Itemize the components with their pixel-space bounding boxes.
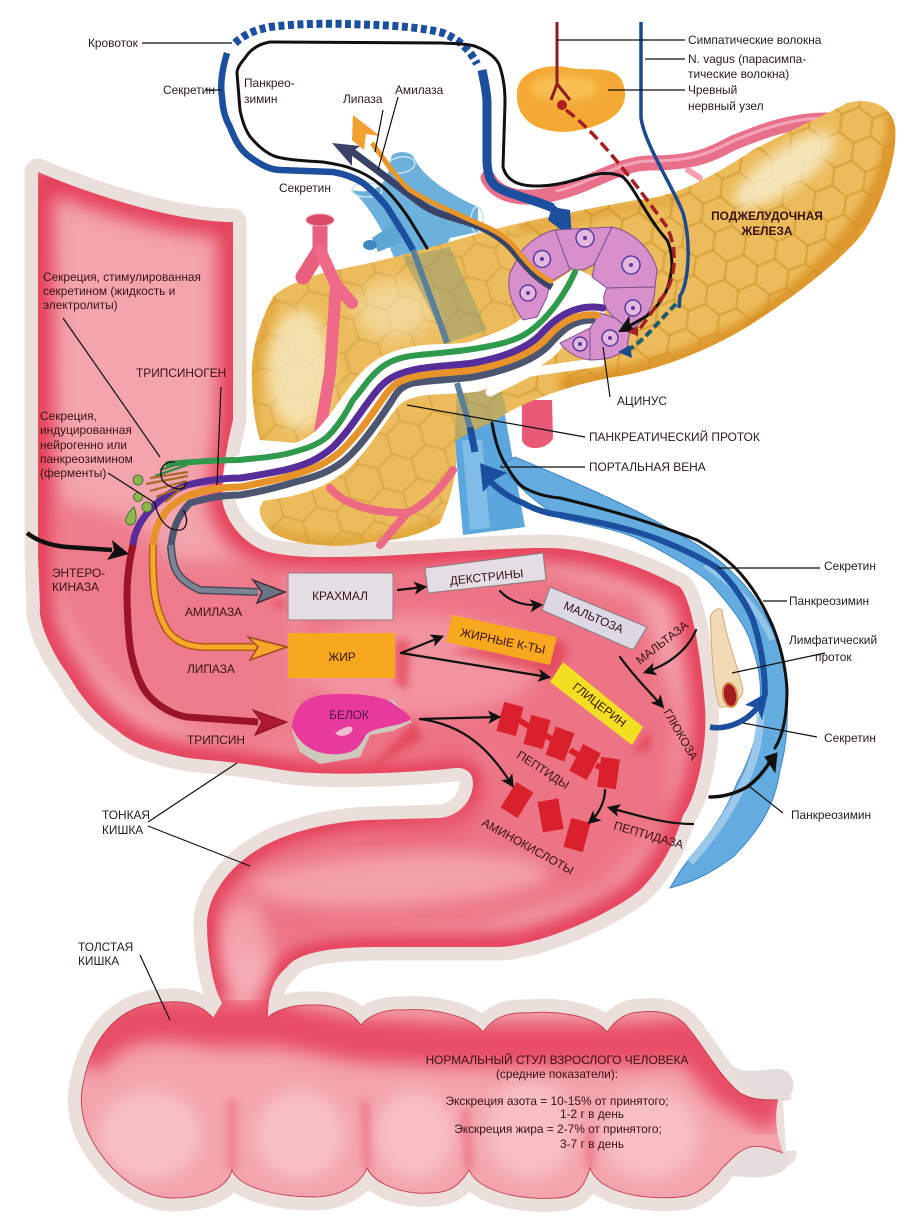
enzyme labels in lumen: ГЛЮКОЗА bbox=[660, 706, 701, 763]
top right labels: N. vagus (парасимпа- bbox=[688, 52, 806, 66]
top right labels: нервный узел bbox=[688, 99, 764, 113]
substrate box: glycerin bbox=[550, 662, 643, 745]
substrate box: maltose bbox=[542, 587, 647, 650]
leader lines bbox=[63, 40, 825, 1020]
ducts: enzyme bundle to duodenum bbox=[133, 272, 603, 550]
duodenum secretion notes: электролиты) bbox=[43, 298, 118, 312]
enzyme labels in lumen: АМИНОКИСЛОТЫ bbox=[480, 815, 576, 877]
top left labels: Секретин bbox=[163, 83, 215, 97]
orange and navy ducts from acinus to exits bbox=[332, 115, 552, 287]
duodenum secretion notes: Секреция, bbox=[40, 409, 97, 423]
middle right labels: ПАНКРЕАТИЧЕСКИЙ ПРОТОК bbox=[589, 429, 760, 444]
duodenum secretion notes bbox=[40, 270, 226, 480]
label: pancreas: ПОДЖЕЛУДОЧНАЯ bbox=[711, 209, 823, 223]
celiac ganglion bbox=[517, 66, 625, 132]
protein piece bbox=[292, 694, 412, 764]
note: normal adult stool: НОРМАЛЬНЫЙ СТУЛ ВЗРОСЛОГО ЧЕЛОВЕКА bbox=[426, 1052, 688, 1067]
vessel: lower portal vein bbox=[453, 415, 525, 535]
enzyme labels in lumen: МАЛЬТАЗА bbox=[633, 618, 691, 667]
enzyme labels in lumen: КИНАЗА bbox=[52, 580, 99, 594]
label: pancreas: ЖЕЛЕЗА bbox=[740, 224, 793, 238]
top right labels: Симпатические волокна bbox=[688, 33, 822, 47]
substrate box: dextrins: ДЕКСТРИНЫ bbox=[449, 566, 524, 588]
top left labels: Секретин bbox=[279, 181, 331, 195]
top left labels: зимин bbox=[244, 92, 277, 106]
substrate box: maltose: МАЛЬТОЗА bbox=[562, 598, 626, 636]
blue circulation line: secretin (upper) bbox=[221, 24, 572, 452]
intestine labels: ТОНКАЯ bbox=[102, 808, 150, 822]
duodenum secretion notes: Секреция, стимулированная bbox=[43, 270, 201, 284]
note: normal adult stool: Экскреция жира = 2-7% от принятого; bbox=[454, 1122, 662, 1136]
middle right labels: ПОРТАЛЬНАЯ ВЕНА bbox=[589, 460, 706, 474]
black line: pancreozymin bbox=[237, 42, 787, 797]
substrate box: glycerin: ГЛИЦЕРИН bbox=[570, 680, 629, 730]
duodenum secretion notes: ТРИПСИНОГЕН bbox=[136, 366, 226, 380]
substrate box: fatty acids: ЖИРНЫЕ К-ТЫ bbox=[459, 625, 547, 657]
intestine labels bbox=[78, 808, 150, 968]
intestine labels: ТОЛСТАЯ bbox=[78, 940, 133, 954]
enterokinase arrow bbox=[27, 533, 129, 560]
white margin of pancreatic duct bbox=[248, 335, 600, 478]
grey amylase duct bbox=[171, 320, 592, 548]
substrate box: dextrins bbox=[425, 553, 546, 593]
artery: splenic vessel above pancreas bbox=[488, 118, 827, 197]
purple trypsin duct bbox=[133, 307, 603, 545]
substrate box: fat bbox=[288, 633, 395, 678]
peptide chain blocks bbox=[496, 702, 620, 789]
lymph duct bbox=[710, 609, 743, 708]
substrate box: starch: КРАХМАЛ bbox=[312, 589, 368, 603]
middle right labels: АЦИНУС bbox=[617, 394, 667, 408]
top left labels: Панкрео- bbox=[244, 76, 295, 90]
blue line: secretin (lower) bbox=[480, 463, 768, 728]
substrate box: starch bbox=[288, 573, 393, 620]
intestine labels: КИШКА bbox=[102, 823, 143, 837]
panel: pancreas bbox=[240, 90, 900, 550]
duodenum secretion notes: панкреозимином bbox=[40, 452, 133, 466]
substrate box: fatty acids bbox=[446, 615, 557, 665]
middle right labels: Панкреозимин bbox=[789, 594, 869, 608]
middle right labels: Лимфатический bbox=[789, 633, 877, 647]
sympathetic and vagus fibers bbox=[551, 22, 688, 358]
duodenum secretion notes: нейрогенно или bbox=[40, 438, 127, 452]
top right labels: Чревный bbox=[688, 83, 737, 97]
enzyme labels in lumen: ЭНТЕРО- bbox=[52, 566, 105, 580]
papilla: brush and secretion drops bbox=[126, 461, 188, 525]
enzyme labels in lumen: ЛИПАЗА bbox=[187, 662, 235, 676]
intestine labels: КИШКА bbox=[78, 954, 119, 968]
panel: intestine (small and large) bbox=[38, 172, 800, 1198]
middle right labels: проток bbox=[815, 650, 852, 664]
top right labels: тические волокна) bbox=[688, 67, 789, 81]
digestion arrows bbox=[398, 587, 696, 824]
artery: head arteries bbox=[303, 214, 453, 545]
note: normal adult stool: (средние показатели): bbox=[496, 1067, 618, 1081]
middle right labels: Секретин bbox=[824, 559, 876, 573]
enzyme labels in lumen: ПЕПТИДАЗА bbox=[612, 818, 685, 852]
arrow: amylase bbox=[171, 545, 285, 603]
enzyme labels in lumen: АМИЛАЗА bbox=[185, 605, 242, 619]
green secretion duct bbox=[168, 272, 575, 464]
substrate box: fat: ЖИР bbox=[328, 650, 356, 664]
enzyme labels in lumen: ТРИПСИН bbox=[187, 733, 245, 747]
top left labels: Липаза bbox=[343, 92, 383, 106]
top right labels bbox=[688, 33, 822, 113]
arrow: lipase bbox=[153, 545, 287, 660]
middle right labels: Секретин bbox=[824, 731, 876, 745]
top left labels bbox=[88, 36, 444, 195]
amino acid blocks bbox=[501, 782, 591, 852]
note: normal adult stool: Экскреция азота = 10-15% от принятого; bbox=[445, 1094, 669, 1108]
note: normal adult stool: 3-7 г в день bbox=[560, 1137, 624, 1151]
note: normal adult stool: 1-2 г в день bbox=[560, 1107, 624, 1121]
top left labels: Кровоток bbox=[88, 36, 139, 50]
middle right labels: Панкреозимин bbox=[791, 808, 871, 822]
duodenum secretion notes: индуцированная bbox=[40, 423, 132, 437]
protein piece: БЕЛОК bbox=[329, 708, 369, 722]
acinus bbox=[509, 227, 657, 360]
duodenum secretion notes: (ферменты) bbox=[40, 466, 106, 480]
enzyme labels in lumen bbox=[52, 566, 701, 877]
callout loops bbox=[155, 462, 187, 530]
middle right labels bbox=[589, 394, 877, 822]
enzyme labels in lumen: ПЕПТИДЫ bbox=[514, 748, 572, 792]
orange lipase duct bbox=[153, 315, 597, 550]
arrow: trypsin bbox=[127, 545, 287, 735]
shadows under substrate boxes bbox=[270, 600, 650, 768]
label: pancreas bbox=[711, 209, 823, 238]
mesenteric vein band bbox=[500, 457, 787, 888]
duodenum secretion notes: секретином (жидкость и bbox=[43, 284, 175, 298]
note: normal adult stool bbox=[426, 1052, 688, 1151]
top left labels: Амилаза bbox=[395, 83, 444, 97]
vessel: upper portal vein branches bbox=[352, 152, 483, 275]
artery: right lower stump bbox=[522, 400, 553, 448]
